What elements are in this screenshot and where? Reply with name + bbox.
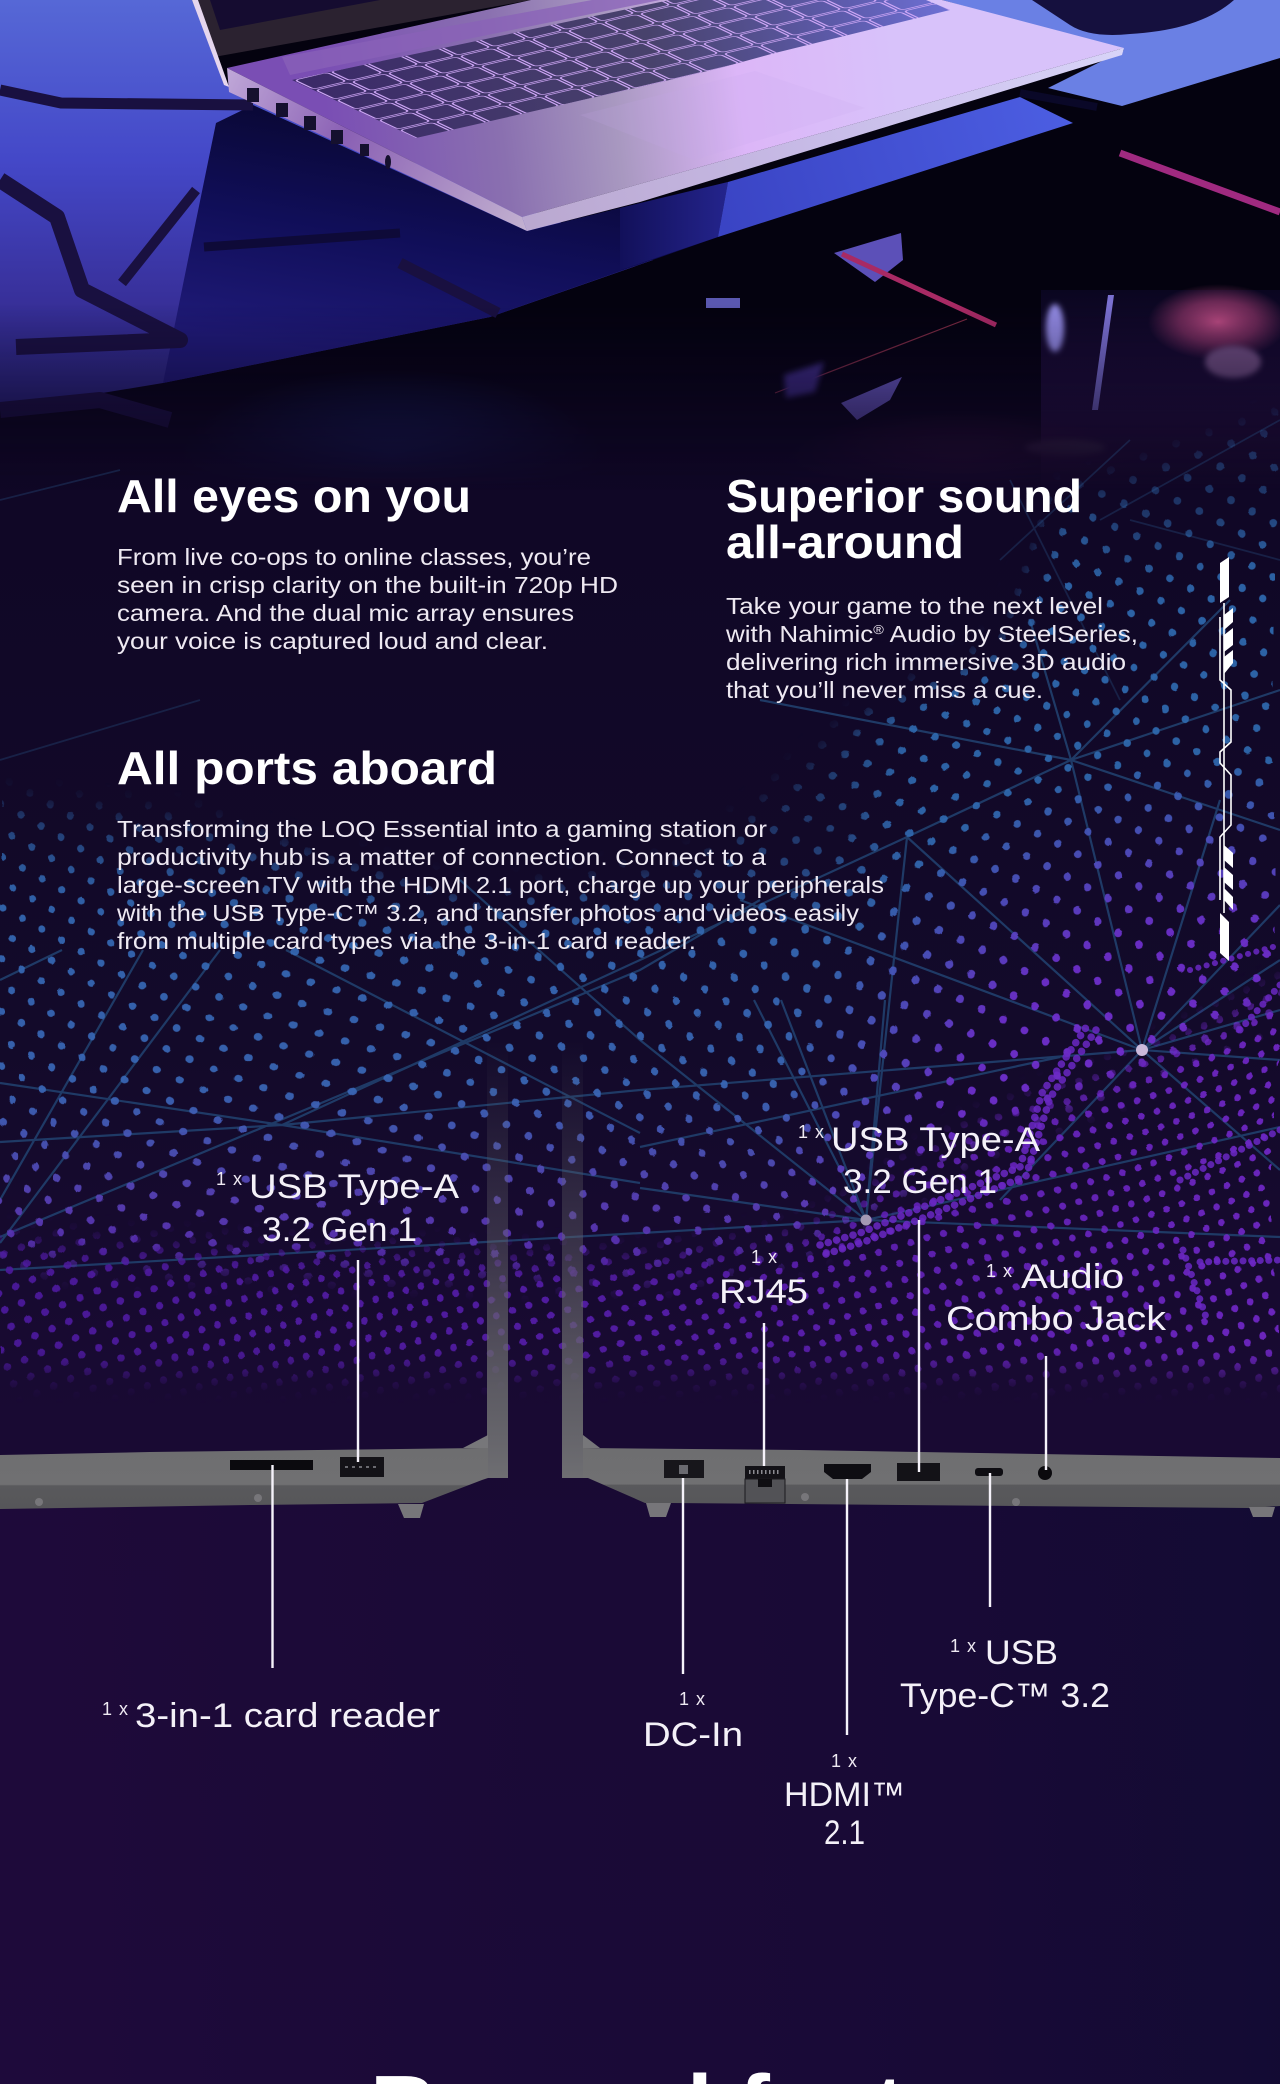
label: HDMI: 1 x: [831, 1751, 858, 1771]
secondary hub node: [860, 1214, 872, 1226]
body text: [116, 816, 884, 954]
body text: Take your game to the next level: [726, 593, 1103, 619]
label: audio combo jack: Audio: [1021, 1258, 1124, 1296]
text block: Superior sound: [725, 470, 1138, 703]
front edge: [522, 48, 1124, 231]
touchpad: [580, 71, 865, 160]
body text: Audio by SteelSeries,: [884, 621, 1138, 647]
callout lines: [272, 1220, 1046, 1735]
label: right USB Type-A: 1 x: [798, 1122, 825, 1142]
body text: with the USB Type-C™ 3.2, and transfer photos and videos easily: [116, 900, 859, 926]
mouse: [1032, 0, 1234, 35]
foot: [398, 1504, 424, 1518]
label: RJ45: RJ45: [719, 1273, 808, 1311]
label: right USB Type-A: USB Type-A: [831, 1121, 1040, 1159]
body text: that you’ll never miss a cue.: [726, 677, 1043, 703]
hero photo: laptop on desk: [0, 0, 1280, 460]
body text: [117, 544, 618, 654]
body text: large-screen TV with the HDMI 2.1 port, charge up your peripherals: [117, 872, 884, 898]
lid: [562, 1040, 583, 1478]
port: DC-In: [664, 1460, 704, 1478]
label: USB Type-C: Type-C™ 3.2: [900, 1677, 1110, 1715]
label: DC-In: [643, 1689, 743, 1754]
label: DC-In: DC-In: [643, 1716, 743, 1754]
laptop lid and screen: [192, 0, 531, 87]
body: [0, 1448, 488, 1509]
label: 3-in-1 card reader: 1 x: [102, 1699, 129, 1719]
body text: camera. And the dual mic array ensures: [117, 600, 574, 626]
label: HDMI: 2.1: [824, 1814, 865, 1852]
port: USB-A: [897, 1463, 940, 1481]
port: HDMI: [824, 1464, 871, 1479]
feet: [646, 1503, 1275, 1517]
label: 3-in-1 card reader: 3-in-1 card reader: [135, 1697, 440, 1735]
lid: [487, 1040, 508, 1478]
port: USB-A: [340, 1457, 384, 1477]
label: RJ45: 1 x: [751, 1247, 778, 1267]
label: left USB Type-A: 1 x: [216, 1169, 243, 1189]
top surface: [227, 0, 1124, 217]
dot field: [0, 408, 1278, 1298]
label: USB Type-C: 1 x: [950, 1636, 977, 1656]
faint network lines behind text: [0, 420, 1280, 760]
lit desk edge to the right of laptop: [718, 97, 1073, 237]
heading: All ports aboard: [117, 742, 497, 794]
label: right USB Type-A: [798, 1121, 1040, 1201]
hinge strip: [282, 0, 660, 75]
label: audio combo jack: Combo Jack: [946, 1300, 1167, 1338]
purple dot ridges: [820, 945, 1280, 1320]
label: left USB Type-A: 3.2 Gen 1: [262, 1211, 417, 1249]
text block: All eyes on you: [117, 470, 618, 654]
label: audio combo jack: 1 x: [986, 1261, 1013, 1281]
text block: All ports aboard: [116, 742, 884, 954]
side edge: [227, 68, 527, 231]
body text: Transforming the LOQ Essential into a gaming station or: [117, 816, 767, 842]
laptop side view: right: [562, 1040, 1280, 1517]
screws: [35, 1494, 262, 1506]
keyboard: [292, 0, 950, 138]
label: RJ45: [719, 1247, 808, 1311]
port: audio jack: [1038, 1466, 1052, 1480]
label: audio combo jack: [946, 1258, 1167, 1338]
desk surface right: [942, 0, 1280, 106]
body text: ®: [873, 622, 884, 637]
heading: all-around: [726, 516, 964, 568]
label: HDMI: [784, 1751, 905, 1852]
port: USB-C: [975, 1468, 1003, 1476]
heading: [726, 470, 1082, 568]
heading: Superior sound: [726, 470, 1082, 522]
body text: From live co-ops to online classes, you’re: [117, 544, 591, 570]
screws: [801, 1493, 1020, 1506]
label: right USB Type-A: 3.2 Gen 1: [843, 1163, 997, 1201]
body text: from multiple card types via the 3-in-1 card reader.: [117, 928, 696, 954]
cables: [0, 90, 1097, 420]
body text: your voice is captured loud and clear.: [117, 628, 548, 654]
body text: with Nahimic: [726, 621, 859, 647]
label: left USB Type-A: [216, 1168, 459, 1249]
hinge: [583, 1435, 600, 1448]
label: HDMI: HDMI™: [784, 1776, 905, 1814]
red light strips and reflections: [706, 153, 1280, 420]
right reflection: [1032, 286, 1280, 454]
network lines: [0, 600, 1280, 1270]
desk shadow under laptop: [163, 105, 728, 383]
desk patch under laptop front: [620, 182, 728, 270]
body text: seen in crisp clarity on the built-in 720p HD: [117, 572, 618, 598]
label: left USB Type-A: USB Type-A: [249, 1168, 459, 1206]
side ports: [247, 88, 391, 169]
body text: [725, 593, 1138, 703]
body: [583, 1448, 1280, 1508]
label: USB Type-C: USB: [985, 1634, 1058, 1672]
body text: delivering rich immersive 3D audio: [726, 649, 1126, 675]
label: USB Type-C: [900, 1634, 1110, 1715]
label: DC-In: 1 x: [679, 1689, 706, 1709]
body text: productivity hub is a matter of connection. Connect to a: [117, 844, 767, 870]
laptop base: [227, 0, 1124, 231]
port: RJ45: [745, 1466, 785, 1503]
decorative circuit bar: [1220, 557, 1233, 961]
network hub node: [1136, 1044, 1148, 1056]
dense purple dot bands: [0, 972, 1280, 1392]
desk surface left: [0, 0, 653, 410]
laptop side view: left: [0, 1040, 508, 1518]
hinge: [463, 1435, 488, 1448]
port: card slot: [230, 1460, 313, 1470]
heading: All eyes on you: [117, 470, 471, 522]
